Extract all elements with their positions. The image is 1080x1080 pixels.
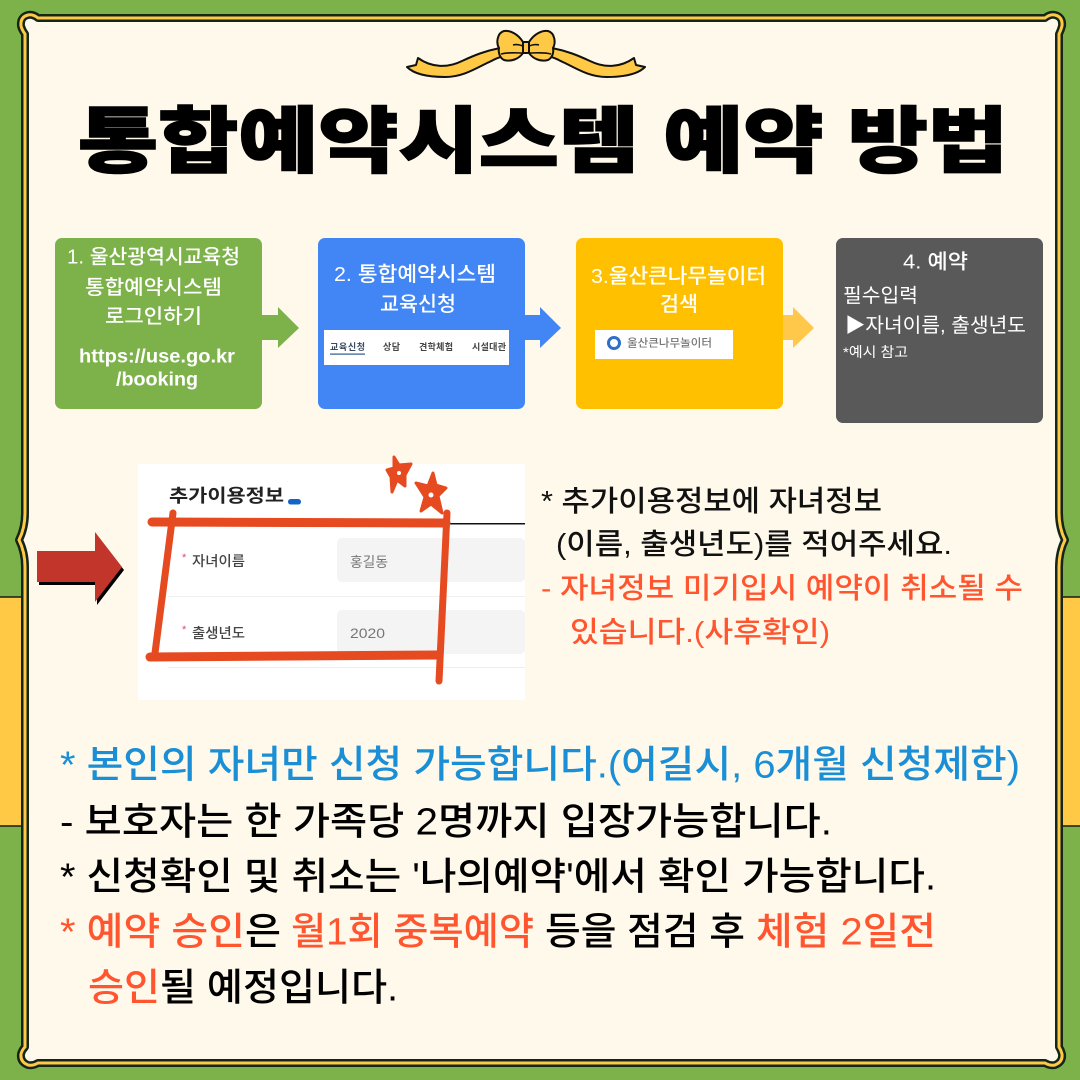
text block: bottom notices: 은 — [245, 912, 281, 954]
panel: form screenshot: * — [182, 552, 187, 564]
panel: step 3: 검색 — [660, 293, 698, 316]
text block: additional info note: (이름, 출생년도)를 적어주세요. — [556, 528, 952, 561]
panel: step 2: 교육신청 — [380, 293, 456, 316]
panel: step 2: 2. 통합예약시스템 — [334, 263, 496, 286]
text block: bottom notices — [60, 744, 1020, 1010]
panel: step 1: 통합예약시스템 — [85, 276, 222, 299]
panel: form screenshot: 추가이용정보 — [169, 486, 284, 506]
panel: step 1: https://use.go.kr — [79, 346, 236, 368]
menu screenshot — [324, 330, 509, 365]
text block: additional info note: - 자녀정보 미기입시 예약이 취소될 수 — [541, 572, 1023, 605]
text block: bottom notices: 체험 2일전 — [756, 912, 936, 954]
icon: hand-drawn stars — [387, 457, 446, 513]
panel: form screenshot: * — [182, 624, 187, 636]
arrow: light yellow — [783, 307, 814, 348]
panel: form screenshot: 출생년도 — [192, 625, 245, 641]
panel: step 4: 필수입력 — [843, 285, 918, 307]
menu screenshot: 상담 — [383, 341, 401, 352]
panel: form screenshot: 홍길동 — [350, 554, 388, 570]
text block: additional info note: * 추가이용정보에 자녀정보 — [541, 485, 882, 518]
panel: step 1: 로그인하기 — [105, 305, 202, 328]
menu screenshot: 시설대관 — [472, 341, 507, 352]
search result screenshot: 울산큰나무놀이터 — [627, 336, 712, 350]
text block: bottom notices: 승인 — [88, 968, 160, 1010]
text block: bottom notices: * 예약 승인 — [60, 912, 245, 954]
menu screenshot: 교육신청 — [330, 341, 365, 352]
icon: ribbon bow — [407, 31, 645, 77]
text block: bottom notices: - 보호자는 한 가족당 2명까지 입장가능합니다. — [60, 802, 832, 844]
panel: form screenshot: 2020 — [350, 625, 385, 641]
panel: step 4: ▶자녀이름, 출생년도 — [845, 314, 1026, 337]
hand-drawn highlight box — [150, 513, 447, 681]
panel: step 2 — [318, 238, 525, 409]
panel: step 1: /booking — [116, 370, 198, 390]
menu screenshot: 견학체험 — [419, 341, 453, 352]
text block: bottom notices: 등을 점검 후 — [545, 912, 745, 954]
panel: step 4 — [836, 238, 1043, 423]
panel: form screenshot — [138, 457, 525, 700]
panel: form screenshot: 자녀이름 — [192, 553, 245, 569]
arrow: green — [262, 307, 299, 348]
text block: bottom notices: * 본인의 자녀만 신청 가능합니다.(어길시, 6개월 신청제한) — [60, 744, 1020, 786]
panel: step 3: 3.울산큰나무놀이터 — [591, 265, 766, 288]
text block: additional info note — [541, 485, 1023, 649]
panel: step 4: 4. 예약 — [903, 250, 968, 274]
panel: step 1 — [55, 238, 262, 409]
text block: bottom notices: * 신청확인 및 취소는 '나의예약'에서 확인 가능합니다. — [60, 856, 936, 898]
text block: additional info note: 있습니다.(사후확인) — [570, 616, 830, 649]
title: 통합예약시스템 예약 방법 — [78, 102, 1008, 182]
text block: bottom notices: 될 예정입니다. — [160, 968, 398, 1010]
text block: bottom notices: 월1회 중복예약 — [291, 912, 534, 954]
panel: step 1: 1. 울산광역시교육청 — [67, 246, 240, 268]
search result screenshot — [595, 330, 733, 359]
arrow: red — [37, 532, 124, 605]
arrow: blue — [525, 307, 561, 348]
panel: step 4: *예시 참고 — [843, 344, 908, 360]
panel: step 3 — [576, 238, 783, 409]
